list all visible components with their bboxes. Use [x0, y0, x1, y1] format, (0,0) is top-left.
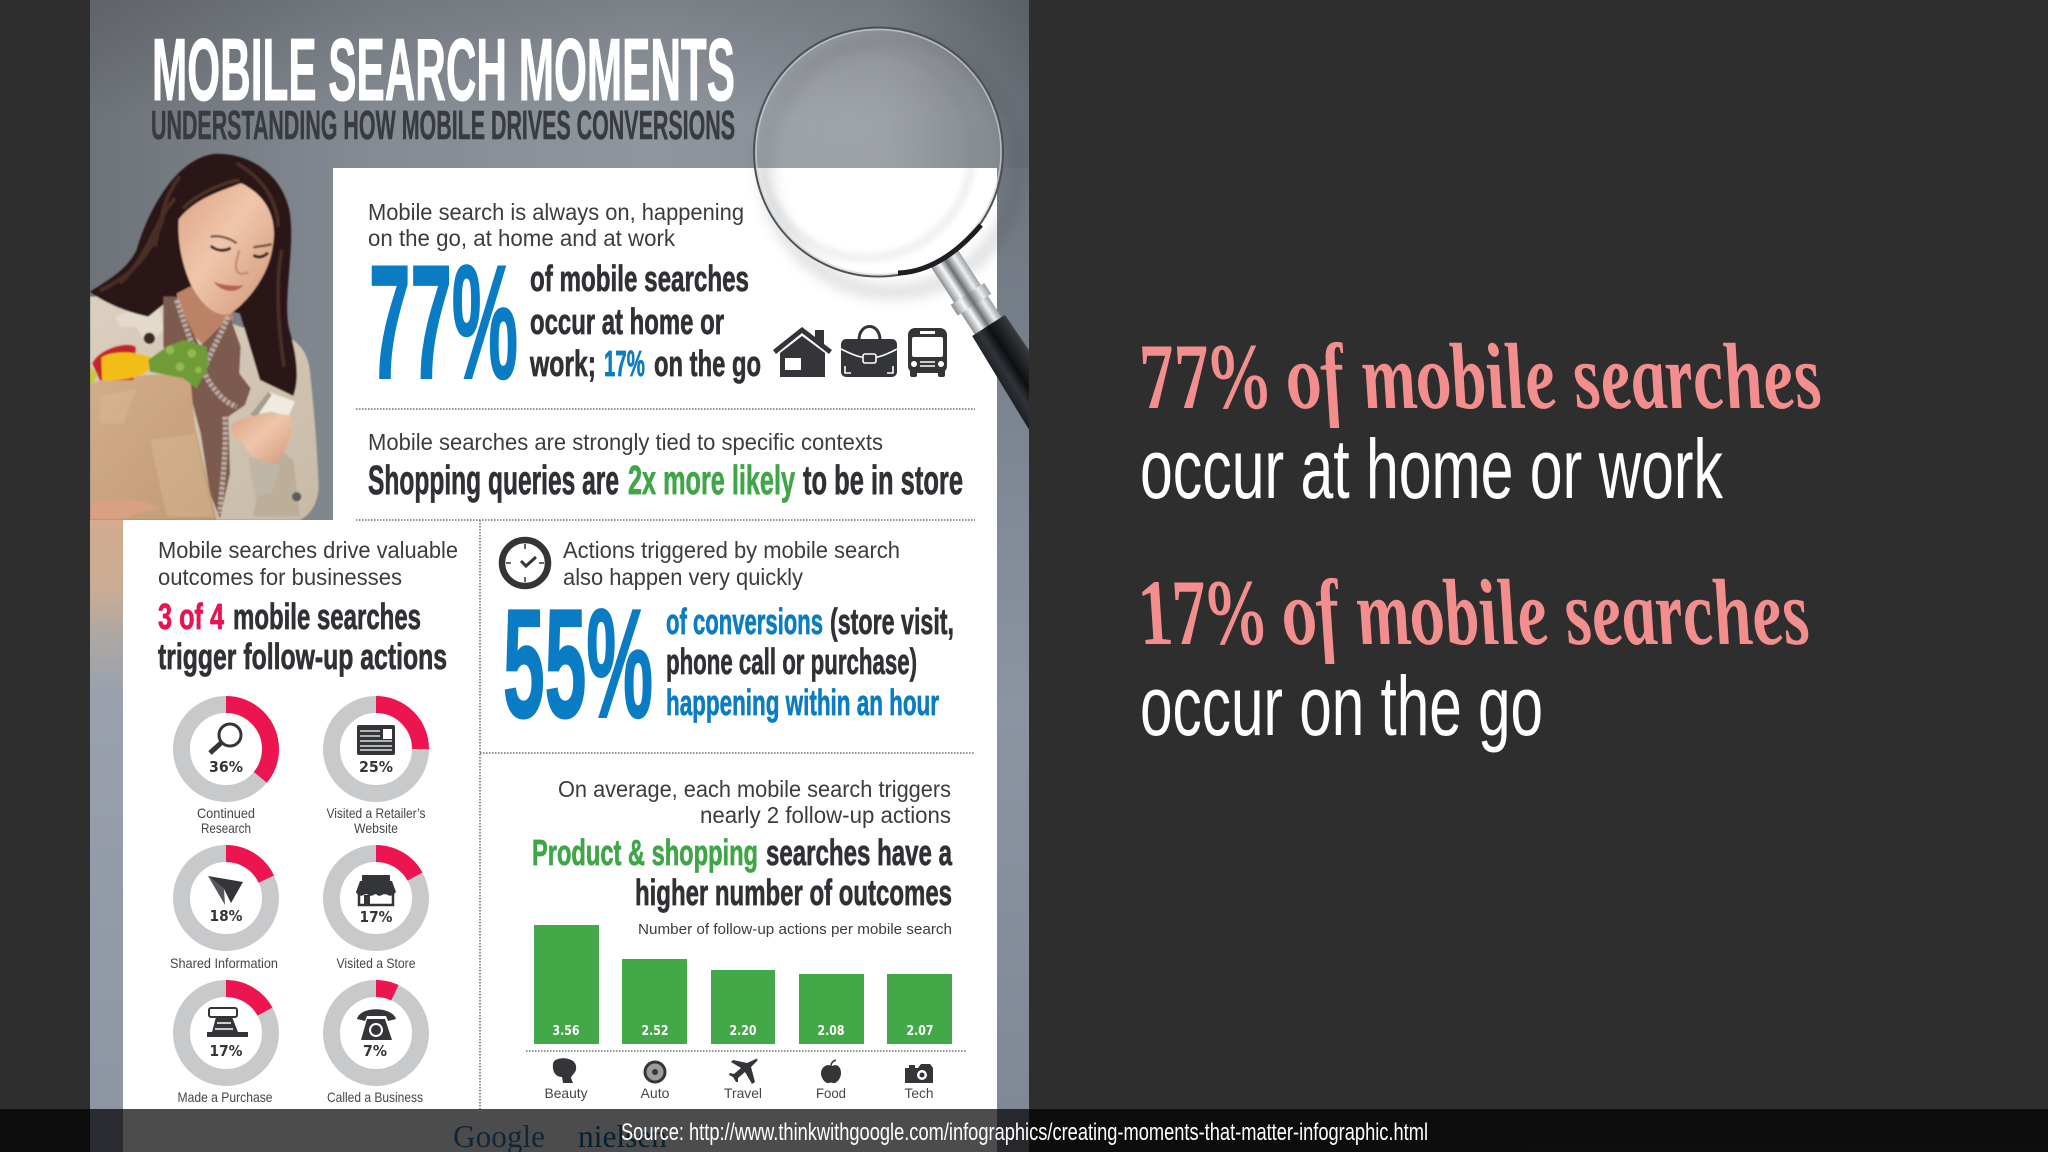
donut: visited a store 17%: 17% [360, 908, 392, 926]
bar chart [534, 925, 952, 1101]
bar: Auto: Auto [640, 1085, 670, 1101]
icon: briefcase [841, 326, 897, 377]
bar: Travel [711, 970, 775, 1101]
outcomes headline: 3 of 4 [158, 596, 224, 637]
outcomes intro [158, 541, 458, 585]
follow-up headline: searches have a [766, 832, 953, 873]
donut: visited a retailer's website 25%: Website [354, 820, 398, 836]
conversion description: (store visit, [830, 601, 954, 642]
quick actions intro [563, 537, 900, 590]
footer logos behind caption bar [453, 1118, 667, 1152]
follow-up headline: Product & shopping [532, 832, 758, 873]
context headline: to be in store [803, 457, 963, 503]
donut: visited a retailer's website 25% [326, 704, 426, 836]
follow-up intro: On average, each mobile search triggers [558, 776, 951, 802]
donut: shared information 18%: Shared Information [170, 955, 278, 971]
follow-up intro [558, 776, 951, 828]
bar: Auto: 2.52 [642, 1024, 668, 1039]
icon: bus [908, 328, 947, 377]
outcomes headline: trigger follow-up actions [158, 636, 447, 677]
donut: shared information 18% [170, 854, 278, 971]
outcomes intro: Mobile searches drive valuable [158, 537, 458, 563]
handle [923, 244, 1135, 533]
context headline [368, 464, 962, 503]
photo: woman with groceries using phone [90, 154, 319, 520]
bar: Beauty: Beauty [544, 1085, 588, 1101]
donut: called a business 7% [327, 988, 423, 1105]
donut: shared information 18%: 18% [210, 907, 242, 925]
outcomes headline [158, 596, 447, 677]
infographic: MOBILE SEARCH MOMENTS [152, 20, 735, 119]
donut: called a business 7%: Called a Business [327, 1089, 423, 1105]
donut: continued research 36%: Research [201, 820, 251, 836]
donut: visited a retailer's website 25%: 25% [359, 758, 393, 776]
bar: Auto [622, 959, 687, 1101]
icon: house [773, 327, 832, 377]
donut: continued research 36% [182, 704, 270, 836]
infographic [90, 0, 1029, 1152]
panel: contexts [368, 429, 963, 503]
stat description: occur at home or [530, 301, 724, 342]
stat description: work; [529, 343, 596, 384]
chart caption: Number of follow-up actions per mobile search [638, 921, 952, 938]
panel: always on [333, 168, 997, 520]
panel: follow-up actions [532, 776, 953, 1101]
takeaway: 77%: occur at home or work [1140, 422, 1724, 516]
follow-up intro: nearly 2 follow-up actions [700, 802, 951, 828]
takeaway: 17%: occur on the go [1140, 659, 1543, 753]
context text: Mobile searches are strongly tied to specific contexts [368, 429, 883, 455]
lens [754, 28, 1002, 276]
conversion description: happening within an hour [666, 682, 939, 723]
donut: made a purchase 17%: 17% [210, 1042, 242, 1060]
donut: made a purchase 17%: Made a Purchase [178, 1089, 273, 1105]
quick actions intro: Actions triggered by mobile search [563, 537, 900, 563]
intro text [368, 199, 744, 251]
bar: Food [799, 974, 864, 1101]
bar: Food: 2.08 [818, 1024, 844, 1039]
stat description: 17% [604, 343, 645, 384]
icon: clock [502, 540, 548, 586]
bar: Travel: Travel [724, 1085, 762, 1101]
panel: quick actions [498, 536, 953, 723]
context headline: 2x more likely [628, 457, 795, 503]
follow-up headline: higher number of outcomes [635, 872, 952, 913]
context headline: Shopping queries are [368, 457, 619, 503]
donut: visited a retailer's website 25%: Visited a Retailer’s [326, 805, 426, 821]
donut: called a business 7%: 7% [363, 1042, 387, 1060]
magnifying glass [754, 28, 1135, 533]
quick actions intro: also happen very quickly [563, 564, 803, 590]
panel: always on: 77% [369, 232, 518, 413]
bar: Tech: 2.07 [906, 1024, 934, 1039]
donut: visited a store 17%: Visited a Store [336, 955, 416, 971]
takeaway: 77% [1130, 324, 1830, 516]
stat description [529, 258, 761, 384]
bar: Tech [887, 974, 952, 1101]
takeaway: 17% [1128, 560, 1818, 753]
subtitle: UNDERSTANDING HOW MOBILE DRIVES CONVERSIONS [151, 102, 735, 148]
panel: valuable outcomes [158, 537, 458, 1105]
donut: continued research 36%: 36% [209, 758, 243, 776]
infographic grey backdrop [90, 0, 1029, 1152]
outcomes intro: outcomes for businesses [158, 564, 402, 590]
bar: Beauty: 3.56 [552, 1024, 580, 1039]
donut: visited a store 17% [332, 854, 420, 971]
bar: Travel: 2.20 [730, 1024, 756, 1039]
source caption bar [0, 1109, 2048, 1152]
conversion description: of conversions [666, 601, 823, 642]
stat description: of mobile searches [530, 258, 749, 299]
donut: continued research 36%: Continued [197, 805, 255, 821]
stat description: on the go [654, 343, 761, 384]
source caption bar: Source: http://www.thinkwithgoogle.com/infographics/creating-moments-that-matter-infographic.html [621, 1119, 1428, 1146]
donut: made a purchase 17% [178, 988, 273, 1105]
bar: Beauty [534, 925, 599, 1101]
panel: quick actions: 55% [503, 577, 653, 750]
panel: lower white sheet [123, 520, 997, 1152]
takeaway: 17%: 17% of mobile searches [1128, 560, 1818, 665]
conversion description: phone call or purchase) [666, 641, 917, 682]
conversion description [666, 601, 954, 723]
intro text: on the go, at home and at work [368, 225, 675, 251]
follow-up headline [532, 832, 953, 913]
bar: Tech: Tech [904, 1085, 934, 1101]
outcomes headline: mobile searches [233, 596, 421, 637]
bar: Food: Food [816, 1085, 846, 1101]
intro text: Mobile search is always on, happening [368, 199, 744, 225]
takeaway: 77%: 77% of mobile searches [1130, 324, 1830, 429]
